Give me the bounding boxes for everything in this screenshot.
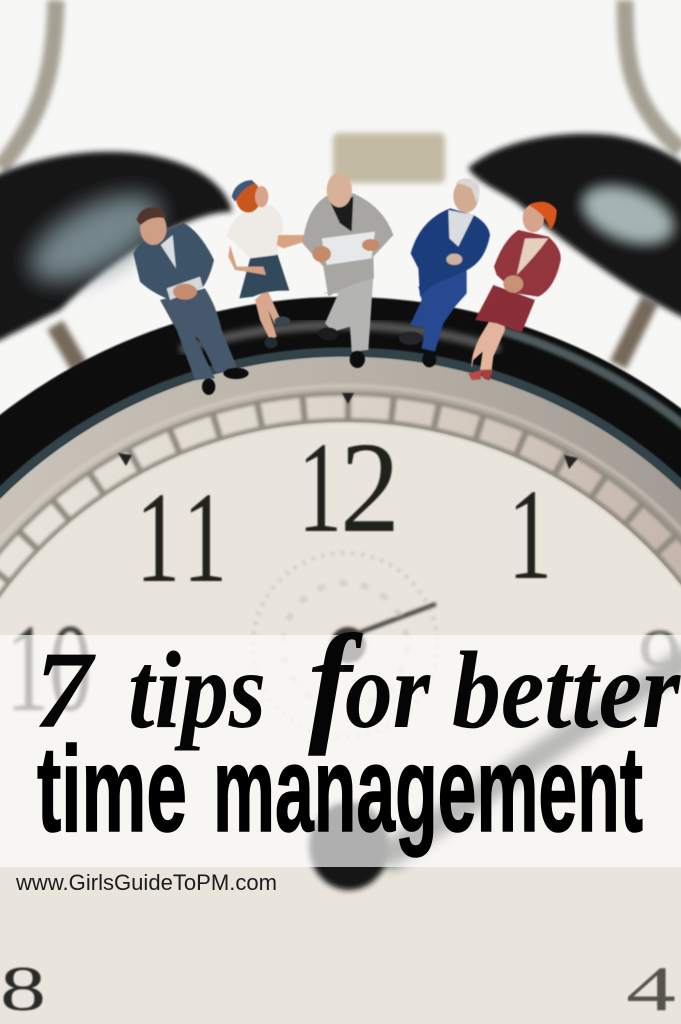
figures sitting on the clock (133, 173, 561, 395)
title: 7 tips for better (34, 608, 681, 757)
figure: man in grey-blue suit (133, 207, 249, 395)
title: 7 tips for better: tips (128, 629, 266, 751)
title: time management: time (37, 721, 187, 857)
clock hands (309, 636, 681, 890)
clock numerals: 2 (340, 416, 400, 560)
clock numerals: 1 (508, 463, 552, 607)
title: 7 tips for better: 7 (34, 629, 96, 751)
icon: left alarm bell (0, 152, 232, 345)
clock rim (0, 297, 681, 900)
blurred numerals (6, 600, 681, 738)
bottom numerals cut by frame: 4 (626, 953, 676, 1024)
clock numerals (136, 416, 552, 610)
figure: man in blue suit (399, 178, 490, 367)
minute track ring (0, 407, 681, 599)
bottom numerals cut by frame: 8 (0, 953, 46, 1024)
title: time management (37, 721, 643, 857)
icon: alarm clock bell legs and hammer (0, 0, 681, 368)
title: 7 tips for better: f (308, 608, 364, 757)
sub dial (253, 553, 437, 737)
bottom numerals cut by frame (0, 953, 676, 1024)
clock numerals: 1 (136, 466, 180, 610)
clock face (0, 352, 681, 1024)
clock numerals: 1 (298, 416, 342, 560)
minute track markers (118, 393, 578, 469)
figure: woman in red suit (468, 202, 561, 381)
website url: www.GirlsGuideToPM.com (15, 870, 277, 895)
translucent title band (0, 635, 681, 867)
clock numerals: 1 (183, 466, 227, 610)
blurred numerals: 10 (6, 600, 92, 738)
title: 7 tips for better: or (345, 629, 431, 751)
icon: right alarm bell (468, 134, 681, 325)
figure: woman in white blouse (227, 180, 308, 348)
figure: man reading newspaper (303, 173, 393, 368)
